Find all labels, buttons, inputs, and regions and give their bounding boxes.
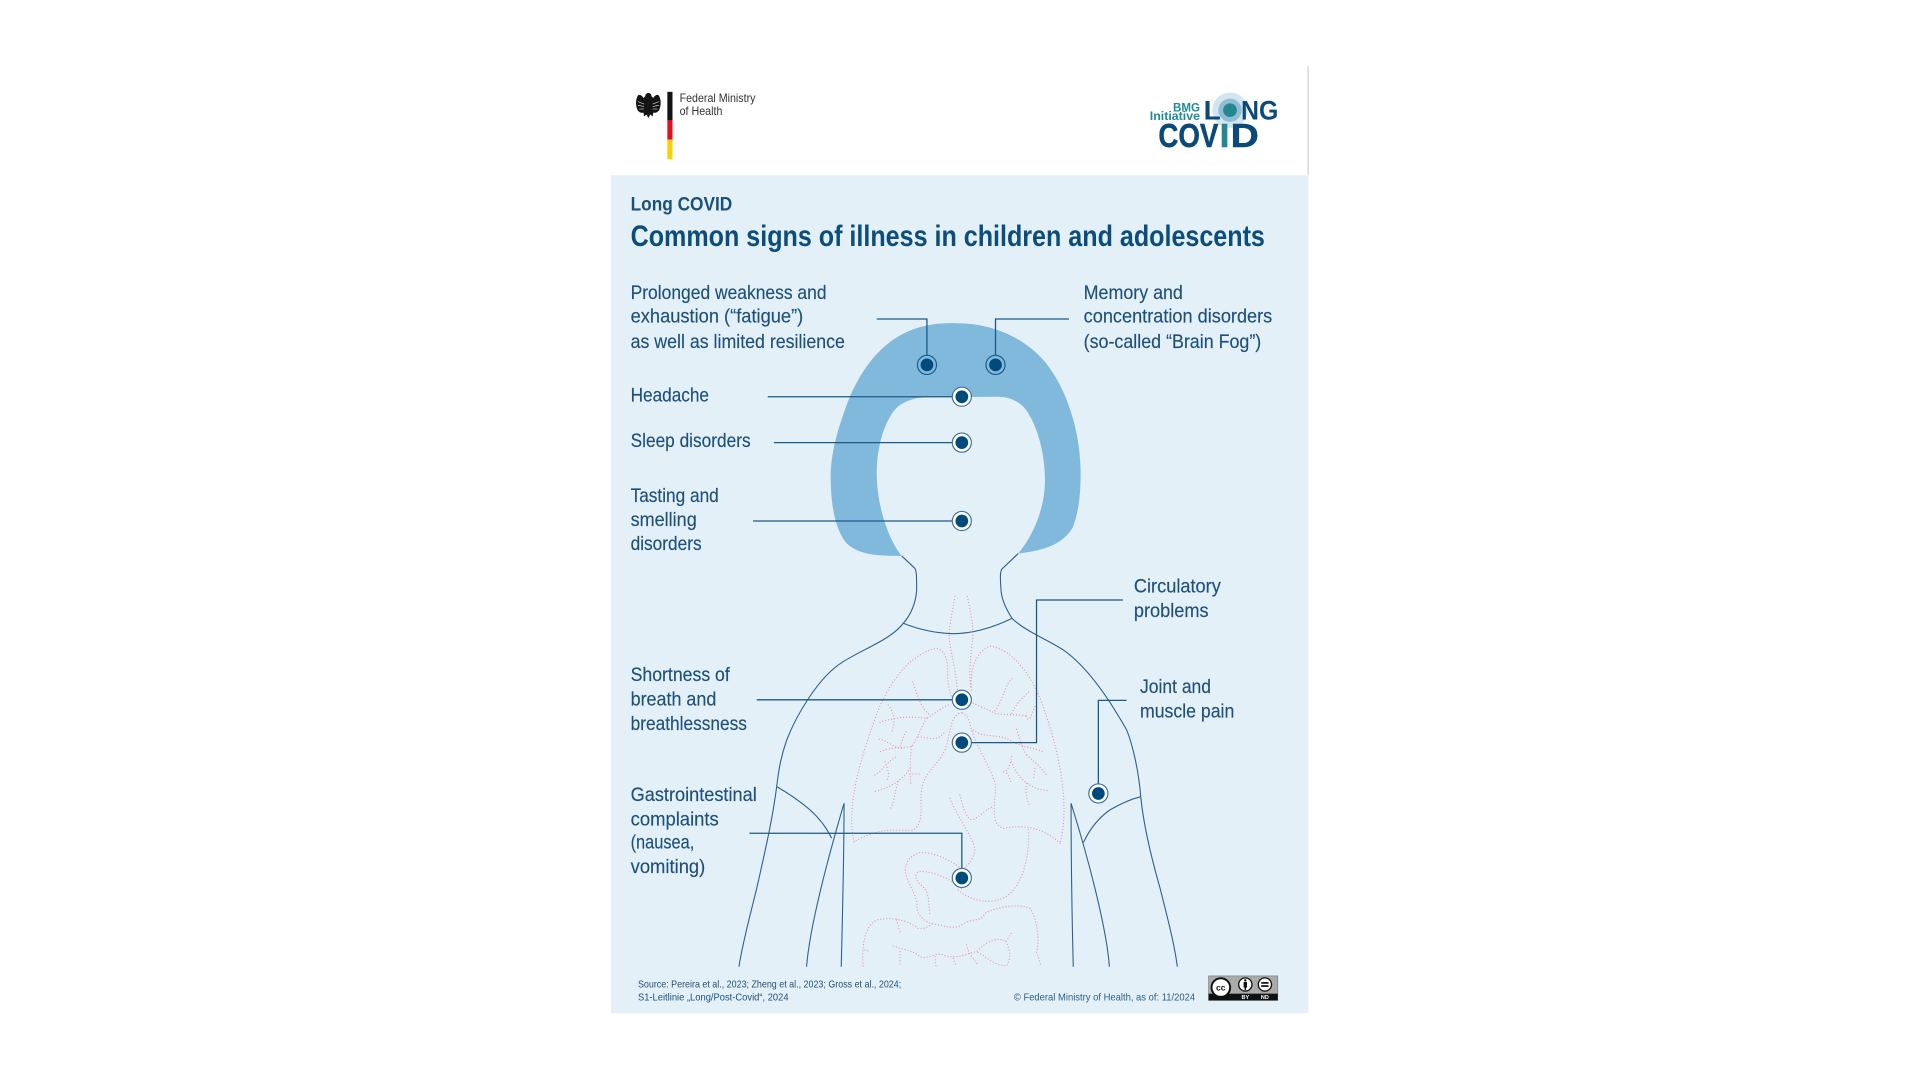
- logo: BMG Initiative Long COVID: I: [1220, 118, 1229, 155]
- stomach and small intestine: [905, 828, 1041, 965]
- illustration: hair: [831, 323, 1081, 556]
- label: headache: Headache: [631, 386, 709, 407]
- label: shortness of breath: breathlessness: [631, 714, 747, 735]
- dot: fatigue: [917, 355, 936, 374]
- footer: source: [638, 980, 901, 1003]
- panel: light blue background: [611, 175, 1308, 1013]
- marker dots: [917, 355, 1108, 888]
- logo: BMG Initiative Long COVID: L: [1204, 95, 1221, 125]
- label: gastrointestinal complaints: vomiting): [631, 857, 705, 878]
- icon: CC BY-ND badge: [1209, 976, 1278, 1001]
- label: memory: (so-called “Brain Fog”): [1084, 332, 1261, 353]
- label: memory: concentration disorders: [1084, 307, 1272, 328]
- label: memory: Memory and: [1084, 283, 1183, 304]
- label: fatigue: Prolonged weakness and: [631, 283, 827, 304]
- logo: BMG Initiative Long COVID: [1150, 92, 1278, 155]
- logo: BMG Initiative Long COVID: Initiative: [1150, 110, 1201, 123]
- logo: BMG Initiative Long COVID: COV: [1158, 118, 1218, 155]
- right shoulder and arm: [1012, 618, 1177, 967]
- illustration: child body outline: [739, 553, 1177, 967]
- label: gastrointestinal complaints: complaints: [631, 809, 719, 830]
- illustration: dotted organs: [852, 596, 1064, 966]
- label: tasting and smelling: [631, 486, 719, 555]
- ministry name: [680, 91, 756, 118]
- heading: kicker: Long COVID: [631, 195, 732, 216]
- right sleeve: [1083, 797, 1141, 843]
- footer: source: Source: Pereira et al., 2023; Zheng et al., 2023; Gross et al., 2024;: [638, 980, 901, 991]
- icon: CC BY-ND badge: cc: [1216, 983, 1226, 993]
- label: shortness of breath: [631, 665, 747, 735]
- logo target circle: [1212, 92, 1248, 128]
- label: joint and muscle pain: muscle pain: [1140, 702, 1234, 723]
- label: fatigue: as well as limited resilience: [631, 332, 845, 353]
- heading: title: Common signs of illness in children and adolescents: [631, 220, 1265, 253]
- dot: sleep: [952, 433, 971, 452]
- dot: memory: [986, 355, 1005, 374]
- dot: circulatory: [952, 733, 971, 752]
- logo: BMG Initiative Long COVID: D: [1231, 118, 1259, 155]
- dot: headache: [952, 387, 971, 406]
- bronchi right: [973, 678, 1048, 806]
- icon: CC BY-ND badge: ND: [1261, 995, 1269, 1001]
- label: tasting and smelling: disorders: [631, 534, 702, 555]
- bronchi left: [873, 682, 948, 808]
- icon: CC BY-ND badge: BY: [1241, 995, 1249, 1001]
- dot: tasting: [952, 511, 971, 531]
- dot: gastrointestinal: [952, 868, 971, 888]
- label: circulatory problems: [1134, 577, 1221, 622]
- label: gastrointestinal complaints: (nausea,: [631, 833, 694, 854]
- label: shortness of breath: Shortness of: [631, 665, 730, 686]
- lungs outline: [852, 646, 1064, 843]
- label: fatigue: exhaustion (“fatigue”): [631, 307, 803, 328]
- ministry name: of Health: [680, 104, 723, 118]
- logo: BMG Initiative Long COVID: BMG: [1173, 101, 1200, 114]
- label: circulatory problems: problems: [1134, 601, 1209, 622]
- left shoulder and arm: [739, 623, 903, 967]
- label: gastrointestinal complaints: [631, 785, 757, 878]
- label: sleep disorders: Sleep disorders: [631, 431, 751, 452]
- flag bar: [667, 92, 672, 159]
- icon: federal eagle: [636, 93, 661, 118]
- connector lines: [749, 319, 1127, 878]
- label: memory: [1084, 283, 1272, 353]
- footer: source: S1-Leitlinie „Long/Post-Covid“, 2024: [638, 992, 789, 1003]
- esophagus and diaphragm: [950, 795, 993, 870]
- left sleeve: [777, 787, 832, 838]
- dot: breath: [952, 690, 971, 709]
- label: circulatory problems: Circulatory: [1134, 577, 1221, 598]
- label: tasting and smelling: Tasting and: [631, 486, 719, 507]
- label: joint and muscle pain: Joint and: [1140, 677, 1211, 698]
- label: fatigue: [631, 283, 845, 353]
- right torso side: [1071, 803, 1109, 967]
- logo: BMG Initiative Long COVID: NG: [1241, 95, 1278, 125]
- left torso side: [807, 803, 844, 967]
- label: shortness of breath: breath and: [631, 689, 716, 710]
- label: gastrointestinal complaints: Gastrointestinal: [631, 785, 757, 806]
- ministry name: Federal Ministry: [680, 91, 756, 105]
- neck and collar: [902, 553, 1018, 634]
- label: joint and muscle pain: [1140, 677, 1234, 723]
- footer: copyright: © Federal Ministry of Health, as of: 11/2024: [1014, 992, 1196, 1003]
- label: tasting and smelling: smelling: [631, 510, 697, 531]
- colon: [863, 919, 1012, 966]
- dot: joints: [1089, 784, 1108, 803]
- logo: Federal Ministry of Health: [636, 91, 756, 159]
- airway: [949, 596, 973, 692]
